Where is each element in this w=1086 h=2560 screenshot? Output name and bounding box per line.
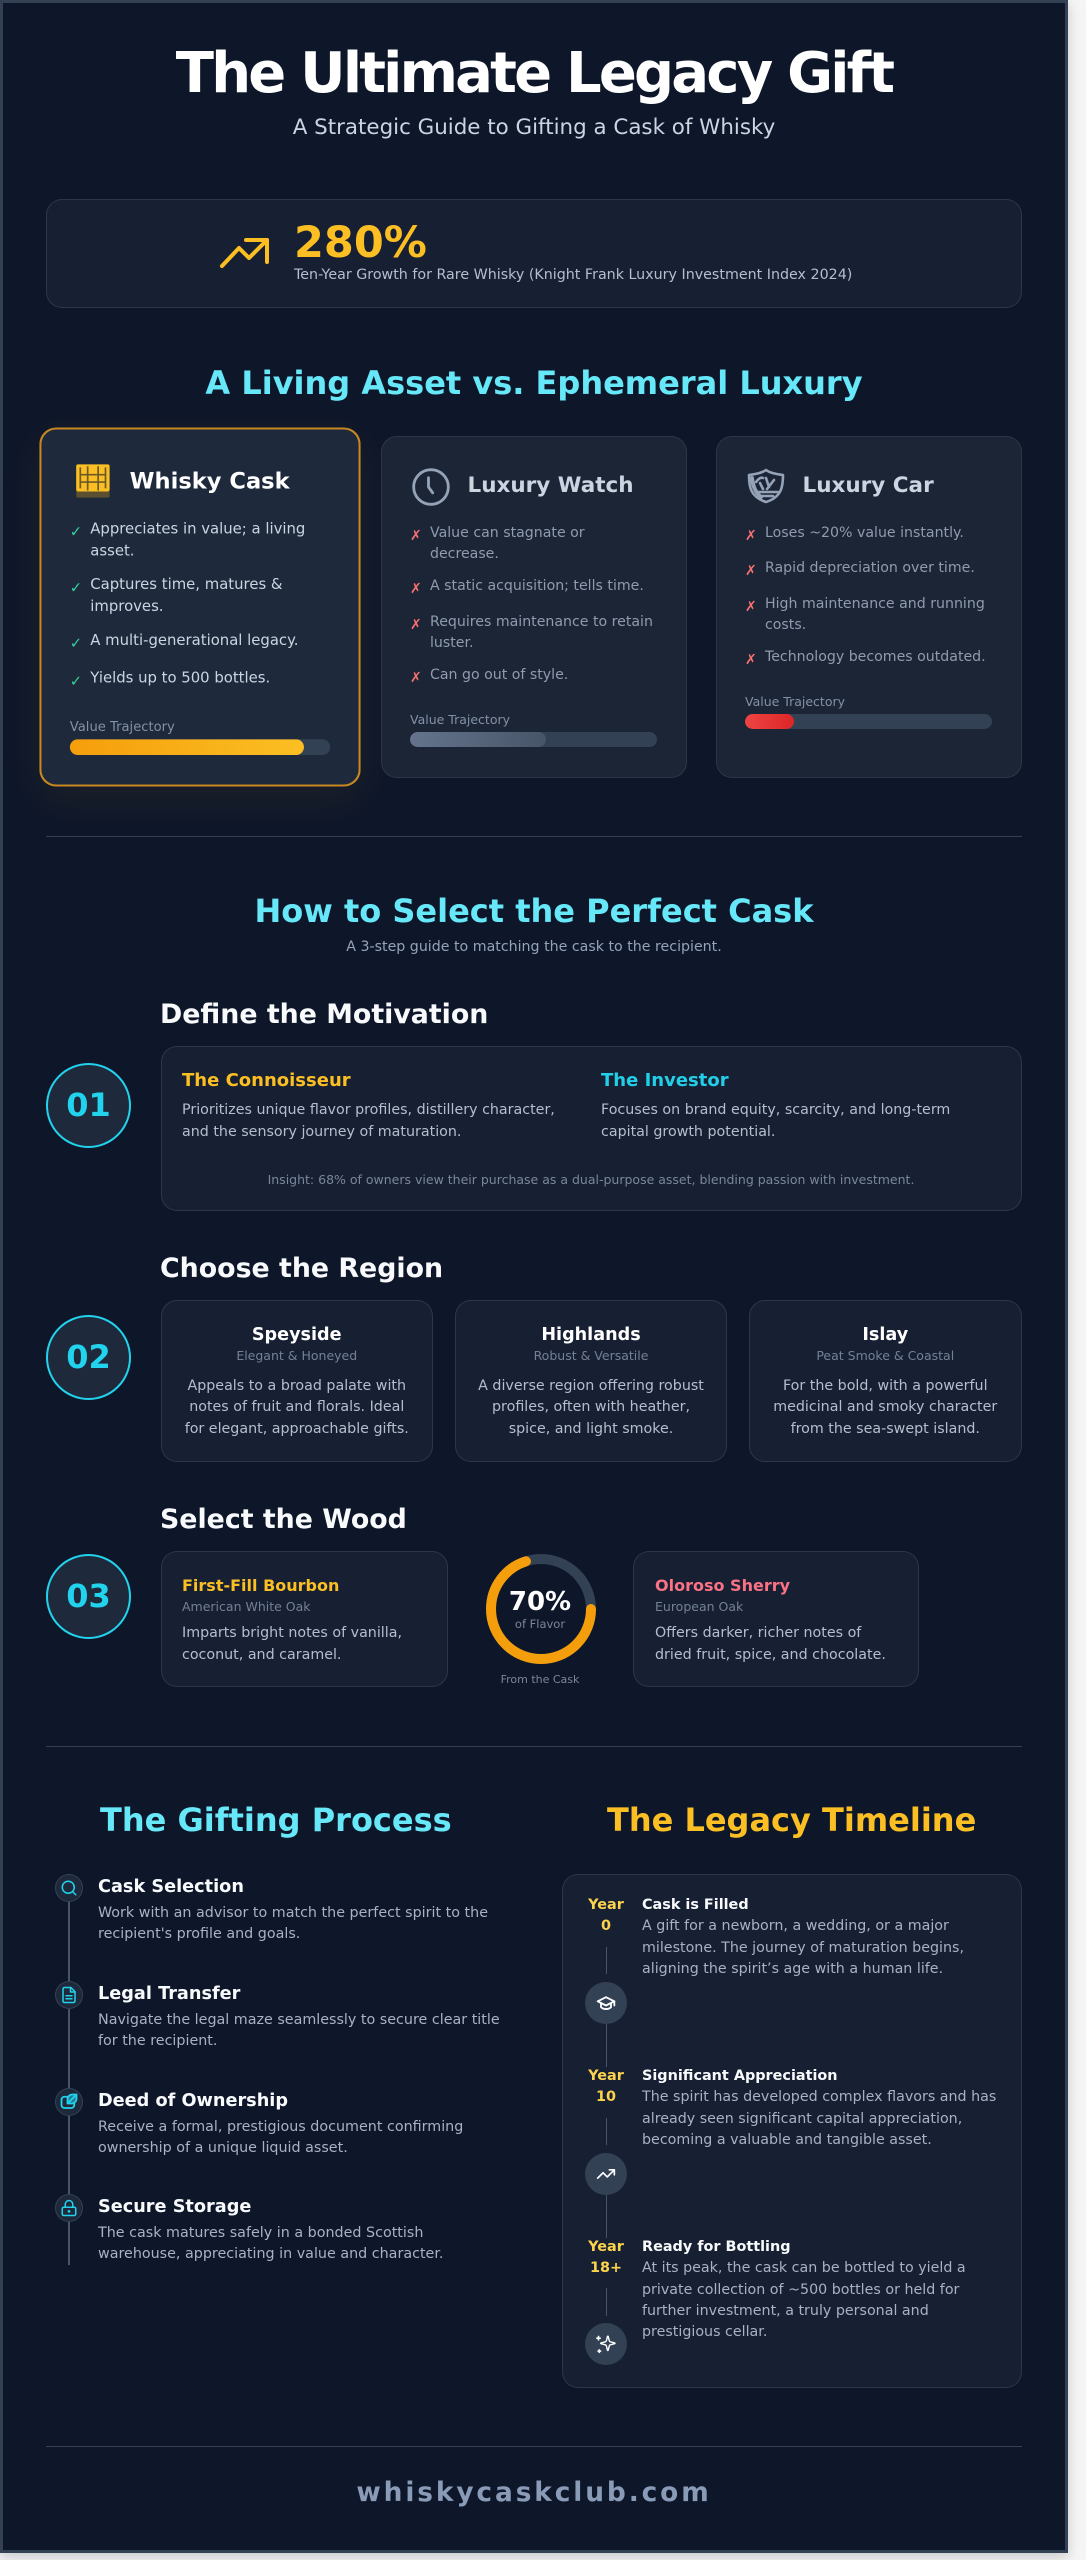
region descriptor: Elegant & Honeyed — [236, 1348, 357, 1363]
region text: medicinal and smoky character — [773, 1399, 997, 1415]
step text: recipient's profile and goals. — [98, 1926, 300, 1942]
connector — [606, 1947, 607, 1974]
drawback: maintenance: ✗ — [410, 616, 422, 632]
wood text: coconut, and caramel. — [182, 1646, 341, 1662]
step text — [98, 2118, 463, 2156]
value trajectory label: Value Trajectory — [410, 712, 510, 727]
panel: legacy timeline — [562, 1874, 1022, 2388]
heading: a living asset: A Living Asset vs. Ephemeral Luxury — [205, 364, 863, 402]
milestone text: becoming a valuable and tangible asset. — [642, 2132, 932, 2148]
region text — [773, 1378, 998, 1436]
connoisseur text: and the sensory journey of maturation. — [182, 1124, 461, 1140]
step title: Deed of Ownership — [98, 2091, 288, 2111]
benefit: value: asset. — [90, 543, 134, 560]
drawback: running costs: ✗ — [745, 598, 757, 614]
donut chart: 70% of flavor — [486, 1554, 596, 1686]
milestone text: milestone. The journey of maturation begins, — [642, 1940, 964, 1956]
connector — [606, 2024, 607, 2067]
investor title: The Investor — [601, 1070, 729, 1091]
step number 03 — [46, 1554, 131, 1639]
insight note: Insight: 68% of owners view their purchase as a dual-purpose asset, blending passion with investment. — [268, 1172, 914, 1187]
region name: Islay — [862, 1325, 908, 1345]
region text: from the sea-swept island. — [791, 1420, 980, 1436]
step number 02 — [46, 1315, 131, 1400]
region text — [185, 1378, 409, 1436]
step title: Secure Storage — [98, 2197, 251, 2217]
step text — [98, 1904, 488, 1942]
donut caption: of Flavor — [515, 1617, 565, 1631]
step heading: region: Choose the Region — [160, 1253, 443, 1284]
benefit: value: ✓ — [69, 524, 82, 540]
step text — [98, 2012, 500, 2049]
year label — [576, 2237, 636, 2280]
milestone text: prestigious cellar. — [642, 2324, 767, 2340]
panel: headline statistic — [46, 199, 1022, 308]
heading: how to select: How to Select the Perfect Cask — [254, 892, 814, 930]
drawback: instant loss: ✗ — [745, 528, 757, 544]
milestone title: Cask is Filled — [642, 1897, 749, 1913]
panel: islay — [749, 1300, 1022, 1462]
step text: Work with an advisor to match the perfect spirit to the — [98, 1904, 488, 1920]
step title: Legal Transfer — [98, 1984, 240, 2004]
panel: oloroso sherry — [633, 1551, 919, 1687]
step heading: motivation: Define the Motivation — [160, 999, 488, 1030]
drawback: value: Value can stagnate or — [430, 524, 585, 540]
step title: Cask Selection — [98, 1877, 244, 1897]
step heading: wood: Select the Wood — [160, 1504, 407, 1535]
milestone text: already seen significant capital appreciation, — [642, 2111, 962, 2127]
benefit: value — [69, 520, 305, 560]
year label: Year — [588, 1897, 624, 1913]
drawback: depreciation: Rapid depreciation over time. — [765, 560, 975, 576]
drawback: value: ✗ — [410, 528, 422, 544]
step number 01: 01 — [66, 1086, 111, 1124]
wood text: Imparts bright notes of vanilla, — [182, 1625, 402, 1641]
milestone text: A gift for a newborn, a wedding, or a major — [642, 1918, 949, 1934]
region name: Highlands — [541, 1325, 641, 1345]
drawback: value — [410, 524, 585, 562]
heading: the gifting process: The Gifting Process — [100, 1801, 452, 1839]
year label: Year — [588, 2068, 624, 2084]
benefit: value: Appreciates in value; a living — [90, 520, 305, 537]
wood title: First-Fill Bourbon — [182, 1576, 339, 1595]
wood text — [182, 1625, 402, 1662]
region descriptor: Robust & Versatile — [534, 1348, 648, 1363]
drawback: maintenance: luster. — [430, 635, 474, 651]
icon: trending up arrow — [220, 238, 270, 268]
icon: clock — [412, 468, 450, 506]
benefit: time: improves. — [90, 598, 163, 615]
milestone text — [642, 1918, 964, 1977]
step text — [98, 2224, 443, 2262]
wood text: Offers darker, richer notes of — [655, 1625, 861, 1641]
panel: luxury car card — [716, 436, 1022, 778]
drawback: value: decrease. — [430, 546, 499, 562]
icon: graduation cap — [585, 1982, 627, 2024]
icon: sparkles — [585, 2323, 627, 2365]
timeline row: year 10 — [585, 2068, 996, 2238]
wood text: dried fruit, spice, and chocolate. — [655, 1646, 886, 1662]
drawback: style: Can go out of style. — [430, 666, 568, 682]
icon: car shield — [748, 468, 784, 504]
region text: For the bold, with a powerful — [783, 1378, 988, 1394]
value trajectory bar — [410, 732, 657, 747]
benefit: legacy: A multi-generational legacy. — [90, 632, 298, 648]
icon: trending up — [585, 2153, 627, 2195]
region name: Speyside — [252, 1325, 342, 1345]
process timeline — [55, 1874, 500, 2265]
value trajectory bar — [745, 714, 992, 729]
region descriptor: Peat Smoke & Coastal — [816, 1348, 954, 1363]
value trajectory label: Value Trajectory — [745, 694, 845, 709]
step text: Navigate the legal maze seamlessly to secure clear title — [98, 2012, 500, 2028]
drawback: running costs — [745, 596, 985, 633]
section subtitle: A 3-step guide to matching the cask to the recipient. — [346, 939, 722, 955]
process connector line — [68, 1888, 70, 2265]
connector — [606, 2195, 607, 2238]
region text: spice, and light smoke. — [509, 1420, 673, 1436]
card title: Luxury Car — [802, 473, 934, 498]
drawback: running costs: High maintenance and running — [765, 596, 985, 612]
step text: ownership of a unique liquid asset. — [98, 2140, 348, 2156]
panel: luxury watch card — [381, 436, 687, 778]
icon: lock — [55, 2194, 83, 2222]
wood origin: European Oak — [655, 1599, 743, 1614]
connector — [606, 2118, 607, 2145]
investor text — [601, 1102, 950, 1140]
panel: highlands — [455, 1300, 727, 1462]
heading: the legacy timeline: The Legacy Timeline — [607, 1801, 976, 1839]
drawback: style: ✗ — [410, 670, 422, 686]
statistic caption: Ten-Year Growth for Rare Whisky (Knight Frank Luxury Investment Index 2024) — [294, 267, 852, 283]
milestone text: aligning the spirit’s age with a human life. — [642, 1961, 943, 1977]
process step: legal transfer — [55, 1981, 500, 2049]
investor text: capital growth potential. — [601, 1124, 775, 1140]
step number 03: 03 — [66, 1577, 111, 1615]
card title: Whisky Cask — [129, 468, 289, 495]
milestone text — [642, 2089, 996, 2148]
milestone title: Ready for Bottling — [642, 2239, 791, 2255]
panel: first-fill bourbon — [160, 1551, 448, 1687]
region text — [478, 1378, 704, 1436]
milestone text — [642, 2258, 966, 2343]
panel: motivation — [160, 1046, 1022, 1211]
region text: A diverse region offering robust — [478, 1378, 704, 1394]
year label: 10 — [596, 2089, 616, 2105]
drawback: maintenance: Requires maintenance to retain — [430, 614, 653, 630]
drawback: static: A static acquisition; tells time. — [430, 578, 644, 594]
donut value: 70% — [509, 1587, 571, 1617]
panel: whisky cask card — [39, 427, 360, 787]
drawback: instant loss: Loses ~20% value instantly. — [765, 524, 964, 540]
step text: The cask matures safely in a bonded Scottish — [98, 2224, 423, 2240]
year label: 0 — [601, 1918, 611, 1934]
drawback: running costs: costs. — [765, 617, 806, 633]
subtitle: A Strategic Guide to Gifting a Cask of Whisky — [293, 115, 775, 140]
milestone title: Significant Appreciation — [642, 2068, 838, 2084]
benefit: time: Captures time, matures & — [90, 576, 282, 593]
process step: cask selection — [55, 1874, 488, 1942]
benefit: time: ✓ — [69, 579, 82, 596]
connoisseur text — [182, 1102, 555, 1140]
connector — [606, 2288, 607, 2316]
drawback: technology: ✗ — [745, 652, 757, 668]
connoisseur title: The Connoisseur — [182, 1070, 351, 1091]
milestone text: further investment, a truly personal and — [642, 2303, 929, 2319]
process step: deed of ownership — [55, 2088, 463, 2156]
year label — [588, 1897, 624, 1934]
benefit: time — [69, 576, 282, 615]
drawback: technology: Technology becomes outdated. — [765, 648, 986, 664]
wood title: Oloroso Sherry — [655, 1576, 790, 1595]
step text: warehouse, appreciating in value and character. — [98, 2246, 443, 2262]
region text: notes of fruit and florals. Ideal — [189, 1399, 404, 1415]
milestone text: At its peak, the cask can be bottled to yield a — [642, 2260, 966, 2276]
panel: speyside — [160, 1300, 433, 1462]
drawback: depreciation: ✗ — [745, 562, 757, 578]
step text: Receive a formal, prestigious document confirming — [98, 2118, 463, 2134]
drawback: maintenance — [410, 614, 653, 651]
card title: Luxury Watch — [468, 473, 634, 498]
drawback: static: ✗ — [410, 580, 422, 596]
footer website: whiskycaskclub.com — [356, 2477, 712, 2508]
investor text: Focuses on brand equity, scarcity, and long-term — [601, 1102, 950, 1118]
year label: Year — [588, 2239, 624, 2255]
value trajectory bar — [69, 739, 330, 755]
region text: profiles, often with heather, — [492, 1399, 690, 1415]
step number 02: 02 — [66, 1338, 111, 1376]
benefit: bottles: ✓ — [69, 673, 82, 689]
year label — [588, 2068, 624, 2105]
donut footnote: From the Cask — [501, 1673, 579, 1686]
milestone text: private collection of ~500 bottles or held for — [642, 2282, 959, 2298]
benefit: legacy: ✓ — [69, 635, 82, 652]
icon: search — [55, 1874, 83, 1902]
icon: cask — [76, 464, 110, 498]
wood text — [655, 1625, 886, 1662]
process step: secure storage — [55, 2194, 443, 2262]
icon: document — [55, 1981, 83, 2009]
timeline row: year 18+ — [585, 2239, 966, 2365]
milestone text: The spirit has developed complex flavors and has — [642, 2089, 996, 2105]
timeline row: year 0 — [585, 1897, 964, 2067]
region text: for elegant, approachable gifts. — [185, 1420, 409, 1436]
statistic value: 280% — [294, 218, 427, 268]
benefit: bottles: Yields up to 500 bottles. — [90, 669, 270, 686]
region text: Appeals to a broad palate with — [187, 1378, 406, 1394]
connoisseur text: Prioritizes unique flavor profiles, distillery character, — [182, 1102, 555, 1118]
value trajectory label: Value Trajectory — [69, 718, 174, 734]
icon: signed deed — [55, 2088, 83, 2116]
step text: for the recipient. — [98, 2033, 217, 2049]
year label: 18+ — [590, 2260, 622, 2276]
title: The Ultimate Legacy Gift — [176, 41, 892, 106]
step number 01 — [46, 1063, 131, 1148]
wood origin: American White Oak — [182, 1599, 311, 1614]
